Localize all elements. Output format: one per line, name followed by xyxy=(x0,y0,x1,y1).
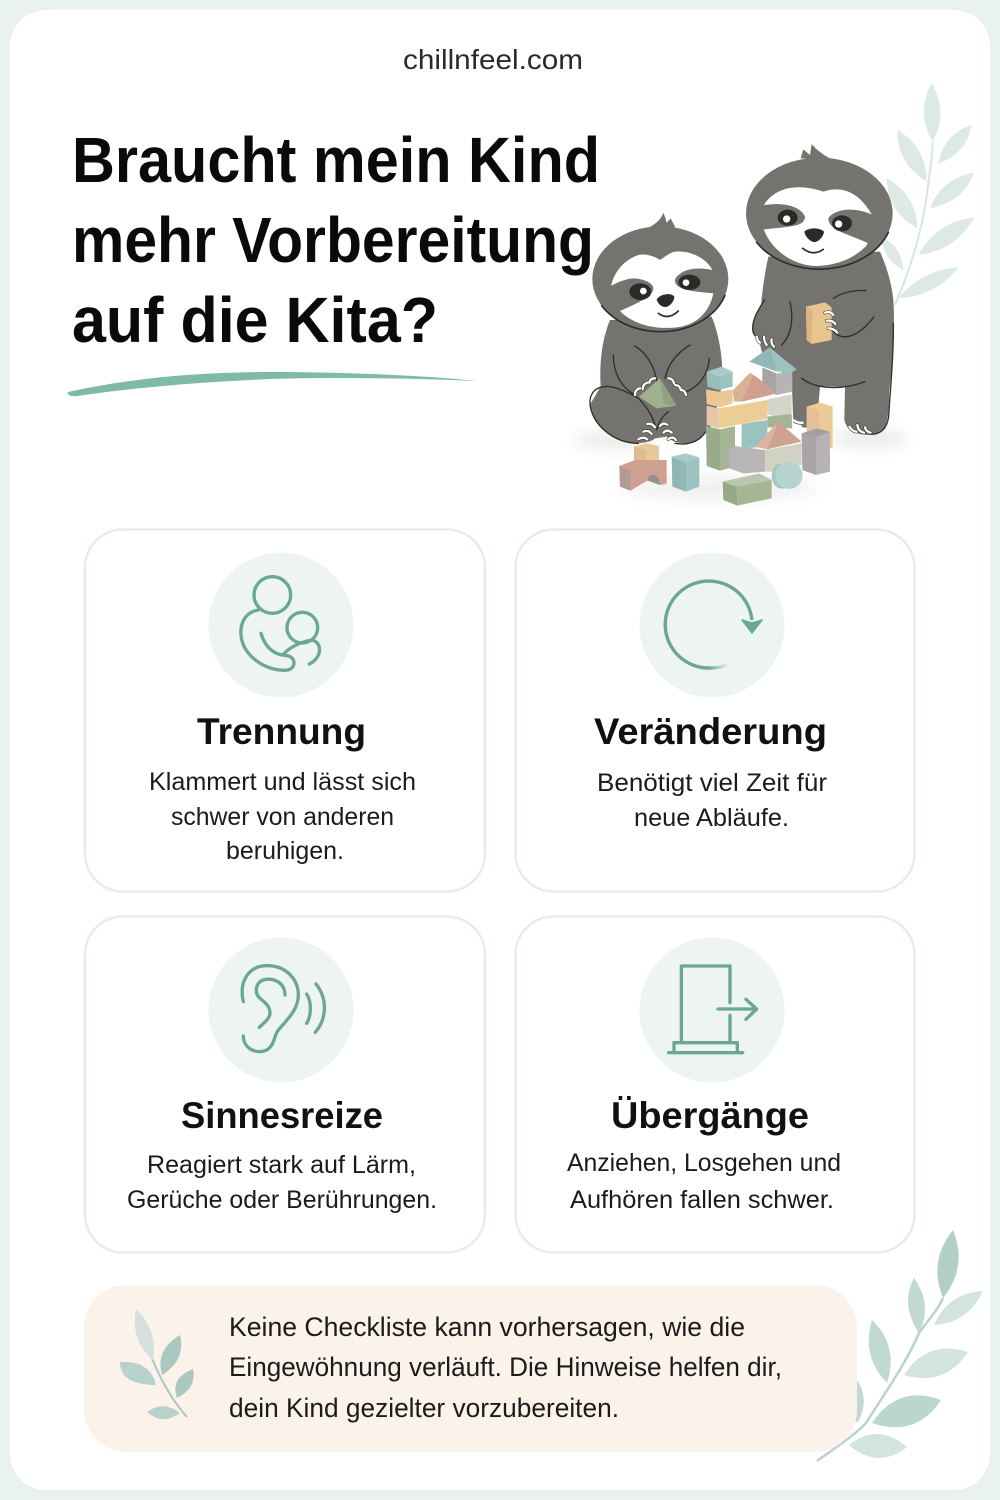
block: teal mid xyxy=(742,420,767,448)
site name: chillnfeel.com xyxy=(403,44,583,75)
description xyxy=(149,768,416,865)
description: Aufhören fallen schwer. xyxy=(570,1186,834,1214)
block: peach xyxy=(706,389,733,407)
block: pink triangle xyxy=(733,373,777,402)
leaf branch behind sloth xyxy=(882,83,974,305)
right sloth xyxy=(746,144,894,435)
heading: Trennung xyxy=(197,711,366,752)
callout text: Eingewöhnung verläuft. Die Hinweise helfen dir, xyxy=(229,1352,782,1382)
block held by right sloth xyxy=(806,302,832,344)
block: low cream xyxy=(765,443,802,472)
description: schwer von anderen xyxy=(171,803,394,831)
block: mauve tall xyxy=(802,428,830,475)
leaf branch bottom right xyxy=(817,1230,983,1461)
description: Gerüche oder Berührungen. xyxy=(127,1186,437,1214)
card: Trennung xyxy=(85,530,485,892)
card: Veränderung xyxy=(516,530,914,892)
block: sage brick xyxy=(723,473,772,506)
callout text: dein Kind gezielter vorzubereiten. xyxy=(229,1393,619,1423)
icon: ear with sound waves xyxy=(242,966,324,1052)
block: long peach xyxy=(707,400,767,428)
title: mehr Vorbereitung xyxy=(72,204,594,276)
block: mauve under roof xyxy=(762,367,792,395)
heading: Veränderung xyxy=(594,711,827,752)
description: Anziehen, Losgehen und xyxy=(567,1149,841,1177)
block: teal roof xyxy=(749,347,797,373)
left sloth xyxy=(590,213,728,444)
ground shadows xyxy=(573,429,908,500)
icon: circular arrow xyxy=(665,581,762,668)
building blocks xyxy=(619,347,833,506)
icon: parent holding child xyxy=(241,577,319,670)
description: Klammert und lässt sich xyxy=(149,768,416,796)
block: pink roof xyxy=(755,422,802,449)
block: cylinder xyxy=(772,462,803,489)
block: arch xyxy=(619,443,667,491)
callout text: Keine Checkliste kann vorhersagen, wie die xyxy=(229,1312,745,1342)
block: peach tall xyxy=(807,403,833,448)
description xyxy=(127,1151,437,1214)
block held by left sloth xyxy=(639,378,677,408)
block: teal top cube xyxy=(707,367,733,390)
illustration: sloths with blocks xyxy=(573,83,974,506)
description: Reagiert stark auf Lärm, xyxy=(147,1151,416,1179)
block: cream and sage stack xyxy=(767,394,792,428)
icon: small leaf sprig xyxy=(120,1309,194,1419)
icon: door with arrow xyxy=(669,966,757,1053)
title xyxy=(72,124,600,356)
block: teal standalone xyxy=(672,453,699,492)
heading: Sinnesreize xyxy=(181,1095,383,1136)
callout xyxy=(84,1285,857,1452)
title: Braucht mein Kind xyxy=(72,124,600,196)
callout text xyxy=(229,1312,782,1423)
description xyxy=(567,1149,841,1214)
block: sage tall xyxy=(706,426,735,471)
title: auf die Kita? xyxy=(72,284,438,356)
title underline swoosh xyxy=(67,372,478,396)
block: low mauve xyxy=(728,446,765,473)
description: neue Abläufe. xyxy=(634,804,789,832)
heading: Übergänge xyxy=(611,1095,809,1136)
description: Benötigt viel Zeit für xyxy=(597,769,827,797)
description xyxy=(597,769,827,832)
description: beruhigen. xyxy=(226,837,344,865)
card: Sinnesreize xyxy=(85,916,485,1252)
card: Übergänge xyxy=(516,916,914,1252)
